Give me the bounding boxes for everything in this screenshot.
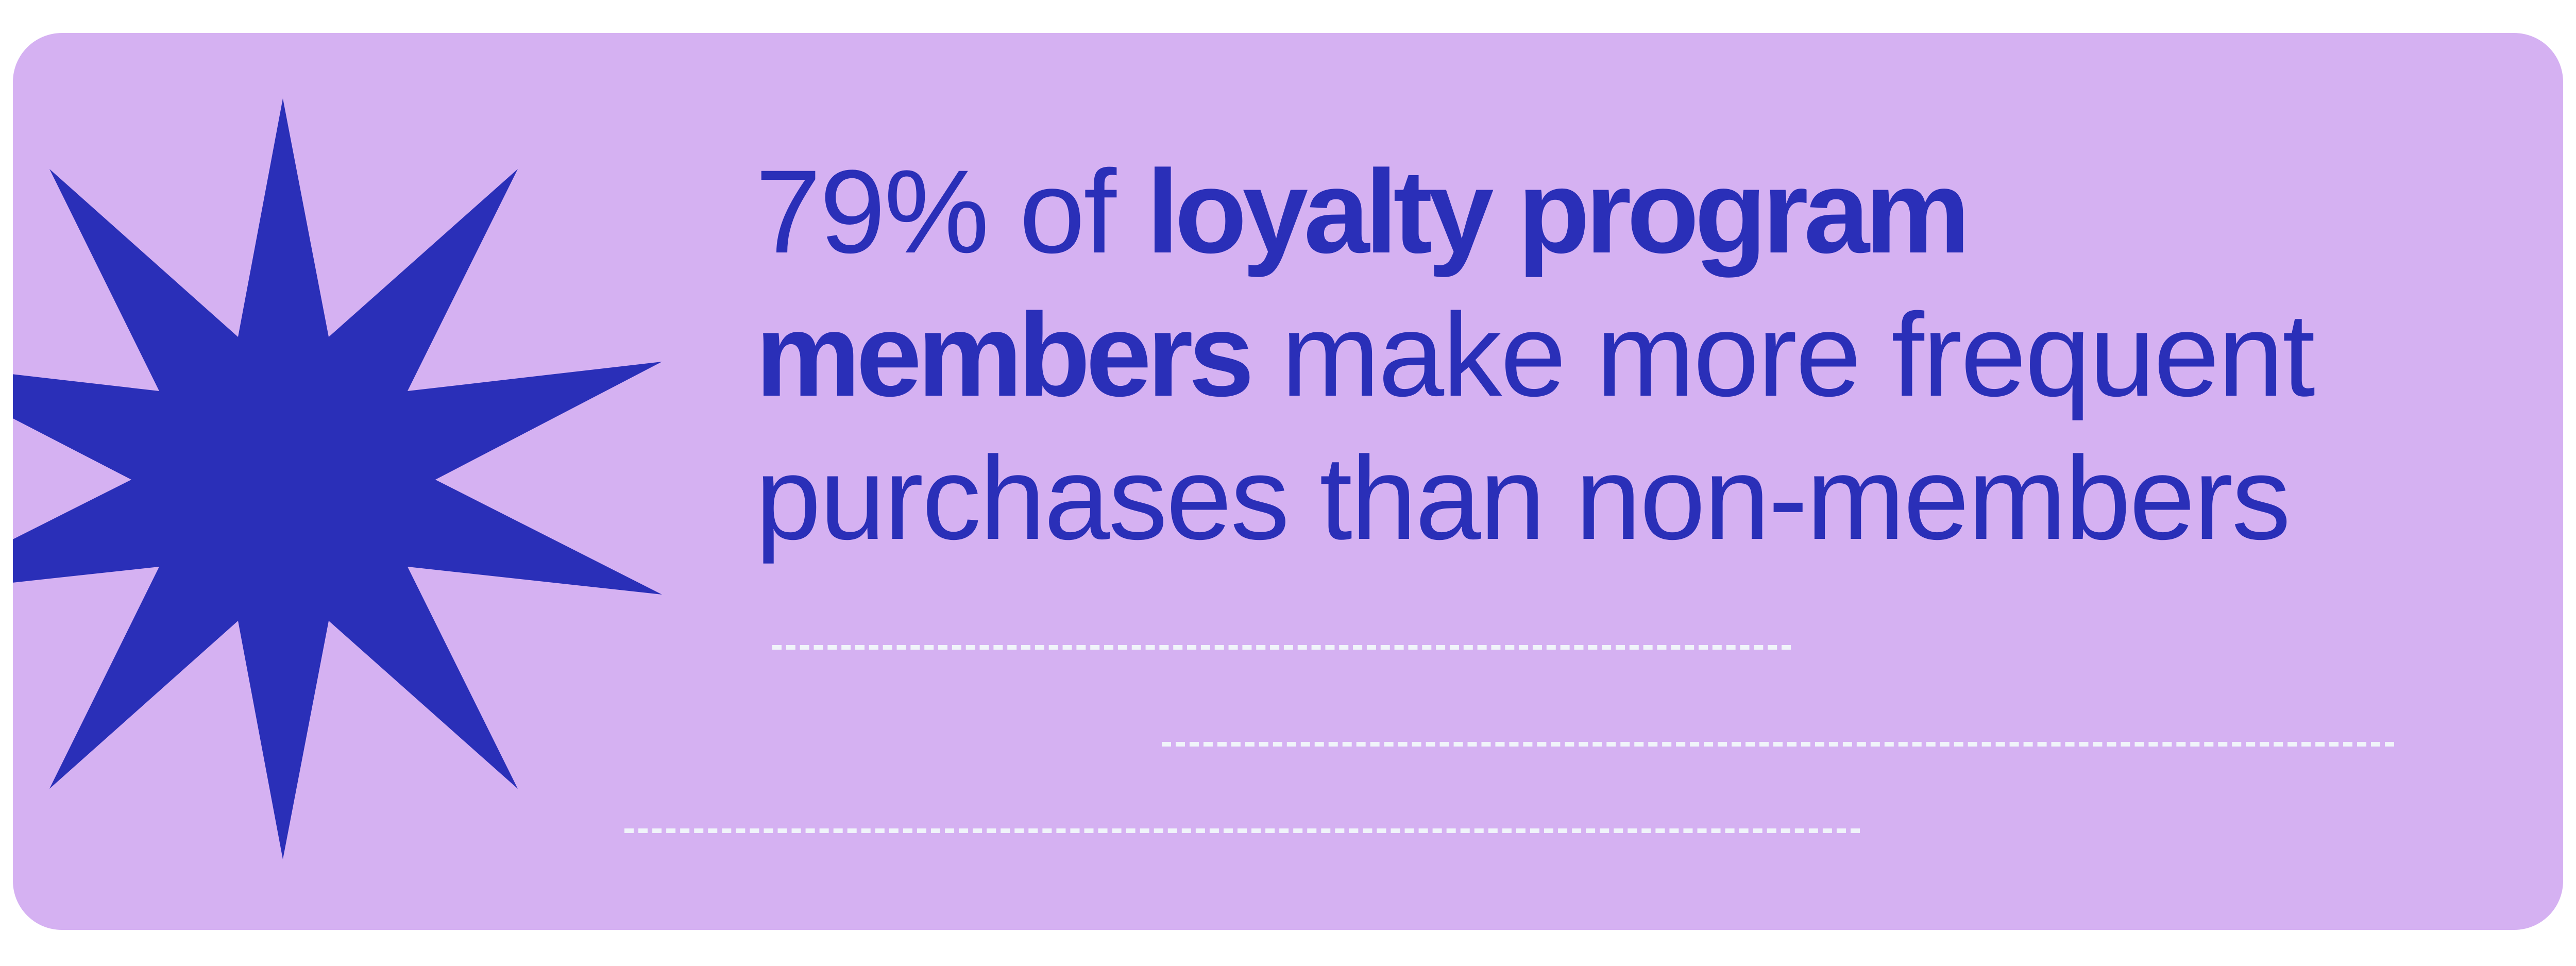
dashed line 3 bbox=[624, 828, 1860, 833]
headline text bbox=[755, 145, 2314, 564]
headline text: 79% of loyalty program bbox=[755, 145, 1965, 278]
headline text: purchases than non-members bbox=[755, 432, 2289, 564]
dashed line 1 bbox=[772, 645, 1791, 650]
headline text: members make more frequent bbox=[755, 289, 2314, 421]
dashed line 2 bbox=[1162, 742, 2394, 747]
